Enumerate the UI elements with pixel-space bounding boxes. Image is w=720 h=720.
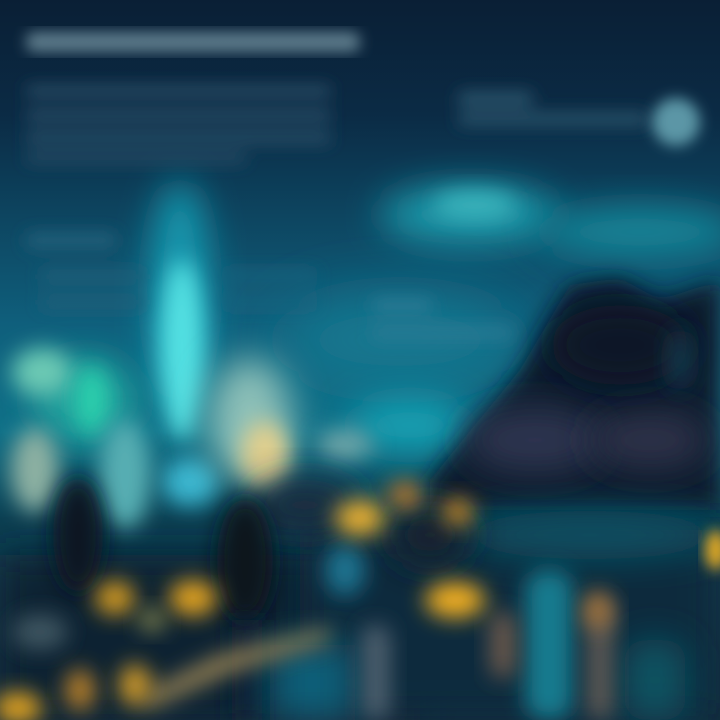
mountain silhouette bbox=[430, 278, 720, 510]
moon icon bbox=[652, 98, 700, 146]
top right caption bbox=[458, 92, 648, 125]
center mid text block bbox=[222, 271, 317, 307]
warm yellow lights bbox=[0, 481, 720, 720]
silhouettes of two figures bbox=[40, 464, 284, 620]
city glow skyline bbox=[11, 180, 373, 530]
heading bbox=[26, 32, 360, 52]
right mid text block bbox=[372, 299, 512, 339]
teal clouds bbox=[280, 185, 720, 451]
left mid text block bbox=[26, 233, 145, 308]
dark foreground ground bbox=[0, 479, 720, 720]
water reflections bbox=[12, 544, 685, 720]
intro text block bbox=[26, 86, 331, 162]
